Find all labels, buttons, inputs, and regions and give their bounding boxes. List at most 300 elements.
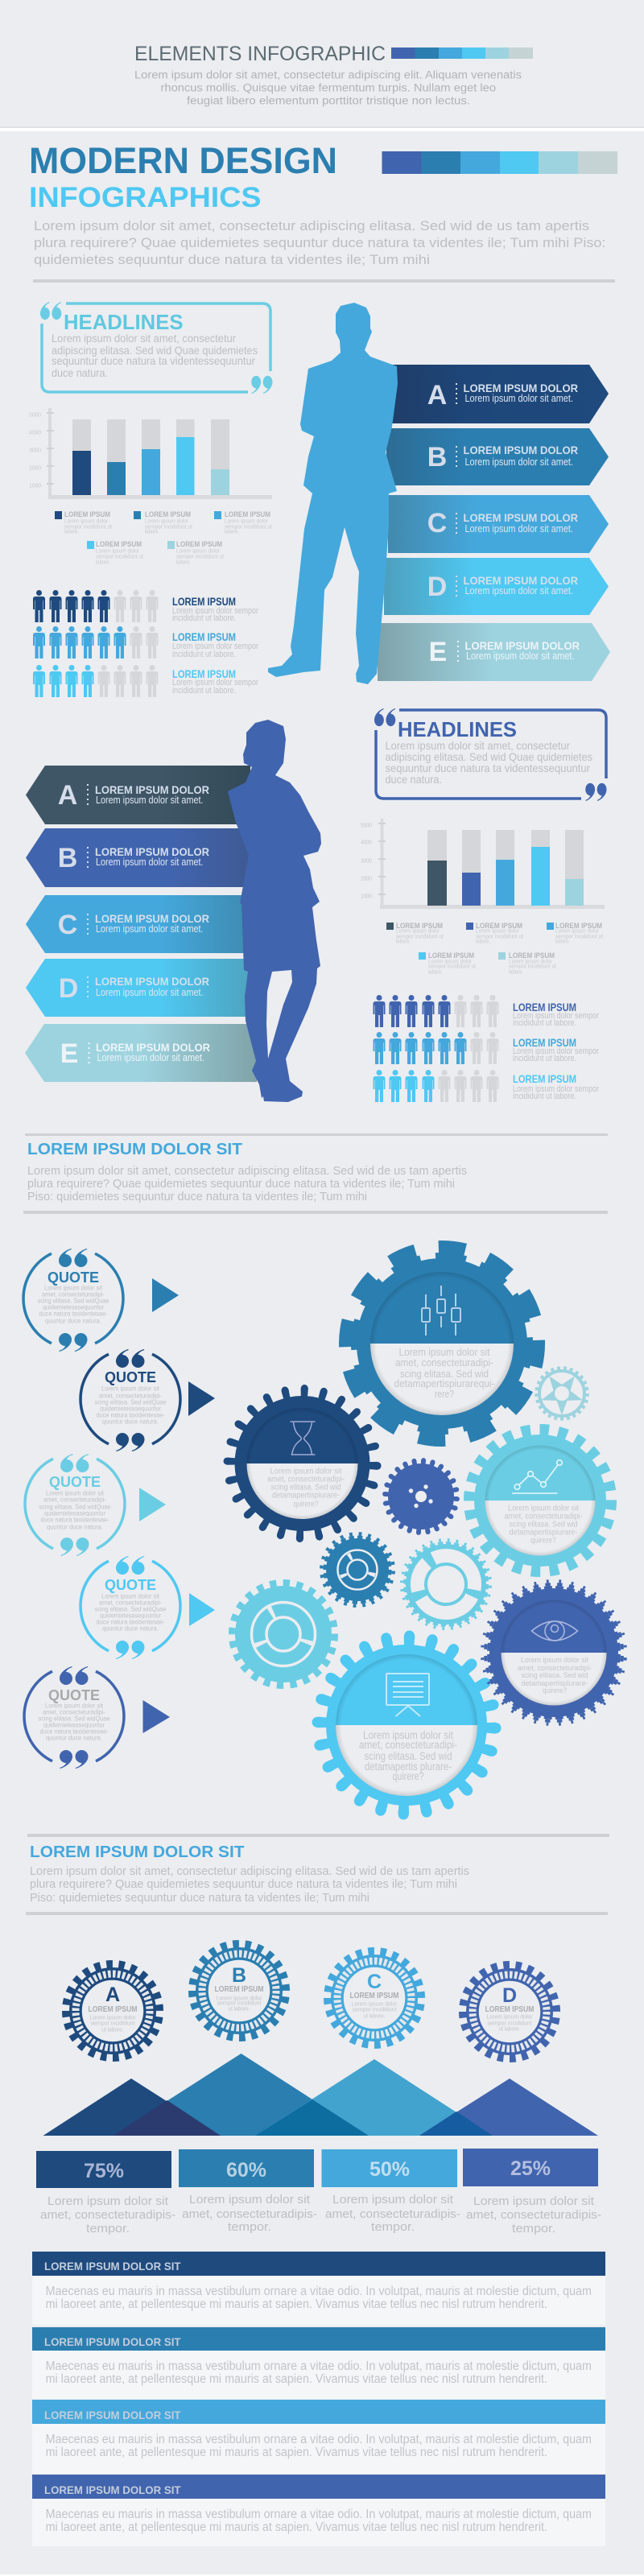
quote circle 3: Lorem ipsum dolor sit: [46, 1489, 105, 1497]
table row 2: Maecenas eu mauris in massa vestibulum ornare a vitae odio. In volutpat, mauris at molestie dictum, quam: [46, 2359, 592, 2373]
quote circle 4: scing elitasa. Sed widQuae: [95, 1605, 167, 1613]
arrow D: Lorem ipsum dolor sit amet.: [96, 987, 203, 998]
pictogram text: incididunt ut labore.: [172, 650, 236, 659]
bar chart 2: [361, 819, 605, 909]
arrow C: Lorem ipsum dolor sit amet.: [96, 923, 203, 935]
arrow A: Lorem ipsum dolor sit amet.: [465, 393, 573, 404]
badge gear D: D: [502, 1984, 517, 2007]
gear 5: line chart icon: [469, 1430, 611, 1571]
caption 3: Lorem ipsum dolor sit: [332, 2193, 454, 2207]
badge gear A: A: [105, 1984, 120, 2006]
chart legend 2: sempor incididunt ut: [509, 964, 556, 969]
quote text: adipiscing elitasa. Sed wid Quae quidemietes: [52, 344, 258, 357]
quote circle 3: quidemietesasequuntur: [44, 1510, 105, 1517]
pictogram text: LOREM IPSUM: [513, 1072, 576, 1085]
icon: closing quote mark: [585, 783, 607, 801]
quote circle 4: [80, 1556, 180, 1659]
badge gear C: C: [367, 1971, 382, 1993]
badge gear D: ut labore.: [499, 2027, 521, 2032]
quote circle 4: amet, consecteturadipi-: [99, 1599, 162, 1607]
caption 4: amet, consecteturadipis-: [466, 2208, 601, 2222]
chart legend 2: Lorem ipsum dolor: [509, 960, 553, 964]
chart legend 2: [386, 922, 603, 976]
section text: [27, 1164, 467, 1203]
axis labels: 1000: [29, 483, 41, 489]
icon: opening quote mark: [40, 302, 61, 320]
quote circle 1: duce natura taxidentesae-: [39, 1311, 108, 1317]
gear text: [394, 1346, 494, 1400]
intro paragraph: plura requirere? Quae quidemietes sequuntur duce natura ta videntes ile; Tum mihi Piso:: [34, 235, 605, 250]
quote circle 4: QUOTE: [105, 1577, 156, 1593]
quote circle 4: Lorem ipsum dolor sit: [101, 1592, 160, 1600]
quote circle 4: quuntur duce natura.: [102, 1624, 159, 1633]
badge gear A: [60, 1959, 165, 2063]
axis labels: 2000: [29, 465, 41, 472]
gear 4: small sprocket: [536, 1368, 588, 1418]
quote circle 2: quuntur duce natura.: [102, 1418, 159, 1425]
arrow C: C: [427, 508, 447, 539]
quote circle 1: QUOTE: [47, 1269, 99, 1286]
caption 4: Lorem ipsum dolor sit: [473, 2194, 595, 2208]
arrow C: [388, 495, 609, 553]
badge gear B: Lorem ipsum dolor: [216, 1996, 262, 2001]
gear text: amet, consecteturadipi-: [395, 1356, 493, 1368]
arrow list left A-E: [25, 766, 257, 1082]
arrow B: LOREM IPSUM DOLOR: [464, 444, 578, 456]
quote circle 2: quidemietesasequuntur: [100, 1406, 161, 1412]
panel: headlines quote box cyan: [40, 302, 272, 394]
caption 1: Lorem ipsum dolor sit: [47, 2194, 169, 2208]
chart legend 2: LOREM IPSUM: [555, 922, 602, 931]
pictogram text: Lorem ipsum dolor sempor: [172, 678, 258, 687]
intro text: [134, 69, 522, 106]
quote circle 1: amet, consecteturadipi-: [42, 1291, 105, 1298]
chart legend 1: labore.: [96, 560, 110, 565]
axis labels: 1000: [361, 894, 372, 900]
arrow 5: [143, 1700, 170, 1733]
gear text: scing elitasa. Sed wid: [509, 1520, 578, 1530]
chart legend 1: Lorem ipsum dolor: [64, 518, 109, 525]
bars: [427, 830, 584, 906]
table row 4: [32, 2475, 605, 2546]
gear text: detamapertisplurare-: [522, 1679, 588, 1688]
arrow C: C: [58, 910, 77, 940]
quote circle 1: scing elitasa. Sed widQuae: [37, 1298, 109, 1304]
icon: line chart: [512, 1460, 562, 1493]
pictogram text: LOREM IPSUM: [172, 667, 236, 680]
table row 2: [32, 2327, 605, 2399]
intro text: rhoncus mollis. Quisque vitae fermentum turpis. Nullam eget leo: [161, 82, 496, 93]
arrow B: LOREM IPSUM DOLOR: [95, 845, 209, 858]
people pictogram 2: [374, 995, 599, 1102]
colour swatch strip small: [391, 47, 533, 59]
chart legend 2: labore.: [555, 939, 570, 945]
chart legend 2: LOREM IPSUM: [428, 952, 474, 960]
percent box 75: [36, 2151, 171, 2188]
arrow E: [25, 1024, 257, 1082]
quote text: [52, 332, 258, 379]
arrow 3: [139, 1488, 166, 1521]
gear 2: hourglass icon: [225, 1385, 380, 1542]
chart legend 2: sempor incididunt ut: [396, 934, 444, 940]
gear text: scing elitasa. Sed wid: [400, 1368, 489, 1380]
badge gear B: sempor incididunt: [217, 2001, 262, 2006]
quote circle 5: quidemietesasequuntur: [43, 1721, 105, 1729]
gear text: amet, consecteturadipi-: [518, 1664, 592, 1673]
heading: headlines: HEADLINES: [64, 310, 184, 334]
chart legend 2: labore.: [396, 939, 411, 945]
section text: Piso: quidemietes sequuntur duce natura ta videntes ile; Tum mihi: [27, 1190, 367, 1203]
arrow D: D: [427, 572, 447, 602]
intro text: feugiat libero elementum porttitor tristique non lectus.: [187, 95, 470, 106]
arrow D: LOREM IPSUM DOLOR: [95, 975, 209, 988]
pictogram text: incididunt ut labore.: [513, 1018, 576, 1028]
arrow E: [378, 623, 610, 681]
chart legend 1: [55, 510, 272, 565]
pictogram text: Lorem ipsum dolor sempor: [513, 1011, 599, 1021]
chart legend 2: LOREM IPSUM: [396, 922, 443, 931]
gear text: Lorem ipsum dolor sit: [363, 1729, 453, 1741]
badge gear A: sempor incididunt: [91, 2021, 135, 2027]
quote circle 2: QUOTE: [105, 1369, 156, 1385]
axis labels: 2000: [361, 876, 372, 882]
quote circle 4: quidemietesasequuntur: [100, 1612, 161, 1620]
chart legend 1: sempor incididunt ut: [64, 525, 112, 530]
table row 3: mi laoreet ante, at pellentesque mi mauris at sapien. Vivamus vitae tellus nec nisl rutrum hendrerit.: [46, 2446, 547, 2459]
arrow D: D: [59, 973, 78, 1004]
pictogram text: incididunt ut labore.: [172, 613, 236, 623]
gear 9: presentation board icon: [314, 1633, 499, 1818]
pictogram text: Lorem ipsum dolor sempor: [513, 1046, 599, 1056]
badge gear D: sempor incididunt: [488, 2021, 532, 2027]
section text: [30, 1864, 469, 1905]
arrow D: Lorem ipsum dolor sit amet.: [465, 585, 573, 597]
section heading: gears: LOREM IPSUM DOLOR SIT: [27, 1141, 242, 1158]
quote circle 2: scing elitasa. Sed widQuae: [95, 1399, 167, 1406]
icon: candlesticks: [422, 1286, 460, 1335]
arrow C: [26, 895, 250, 953]
quote circle 2: Lorem ipsum dolor sit: [101, 1385, 160, 1393]
table row 4: mi laoreet ante, at pellentesque mi mauris at sapien. Vivamus vitae tellus nec nisl rutrum hendrerit.: [46, 2520, 547, 2534]
gear text: [518, 1656, 592, 1695]
caption 2: [182, 2193, 317, 2234]
caption 3: tempor.: [371, 2220, 415, 2234]
quote text: sequuntur duce natura ta videntessequuntur: [52, 354, 255, 367]
axis labels: [361, 823, 372, 900]
table row 4: LOREM IPSUM DOLOR SIT: [44, 2483, 181, 2496]
chart legend 2: labore.: [509, 969, 523, 976]
gear text: rere?: [435, 1388, 454, 1400]
gear text: quirere?: [543, 1686, 567, 1695]
icon: hourglass: [290, 1422, 316, 1455]
quote circle 5: scing elitasa. Sed widQuae: [39, 1715, 110, 1723]
badge gear D: [457, 1959, 562, 2064]
arrow B: B: [427, 442, 447, 473]
gear text: scing elitasa. Sed wid: [522, 1671, 588, 1680]
gear 8: cyan ring: [233, 1583, 334, 1685]
table row 1: LOREM IPSUM DOLOR SIT: [44, 2260, 181, 2273]
chart legend 1: Lorem ipsum dolor: [176, 549, 221, 554]
caption 2: Lorem ipsum dolor sit: [189, 2193, 311, 2207]
pictogram text: Lorem ipsum dolor sempor: [513, 1084, 599, 1094]
arrow C: LOREM IPSUM DOLOR: [95, 912, 209, 925]
chart legend 1: LOREM IPSUM: [145, 510, 191, 519]
table row 1: Maecenas eu mauris in massa vestibulum ornare a vitae odio. In volutpat, mauris at molestie dictum, quam: [46, 2285, 592, 2298]
pictogram text: Lorem ipsum dolor sempor: [172, 606, 258, 616]
chart legend 2: labore.: [476, 939, 490, 945]
gear text: detamapertispiurare-: [509, 1528, 578, 1538]
heading: elements infographic: ELEMENTS INFOGRAPHIC: [134, 43, 386, 65]
badge gear D: Lorem ipsum dolor: [486, 2014, 533, 2021]
arrow A: [392, 365, 609, 423]
heading: headlines: HEADLINES: [398, 717, 517, 741]
pictogram text: LOREM IPSUM: [172, 595, 236, 608]
gear text: amet, consecteturadipi-: [504, 1512, 583, 1521]
quote circle 3: QUOTE: [49, 1474, 101, 1490]
gear text: Lorem ipsum dolor sit: [508, 1504, 579, 1513]
percent box 60: [179, 2149, 314, 2187]
quote circle 5: Lorem ipsum dolor sit: [45, 1702, 104, 1710]
people pictogram 1: [33, 590, 258, 697]
caption 2: amet, consecteturadipis-: [182, 2207, 317, 2221]
colour swatch strip large: [382, 151, 617, 174]
badge gear A: LOREM IPSUM: [89, 2005, 137, 2014]
gear text: Lorem ipsum dolor sit: [270, 1467, 342, 1476]
quote circle 2: amet, consecteturadipi-: [99, 1393, 162, 1399]
gear 7: hollow cyan sprocket: [400, 1538, 492, 1630]
caption 1: amet, consecteturadipis-: [40, 2208, 175, 2222]
intro text: Lorem ipsum dolor sit amet, consectetur adipiscing elit. Aliquam venenatis: [134, 69, 522, 80]
gear text: amet, consecteturadipi-: [359, 1739, 457, 1751]
chart legend 1: Lorem ipsum dolor: [145, 518, 189, 525]
arrow D: [26, 959, 250, 1017]
quote circle 1: quuntur duce natura.: [45, 1317, 101, 1325]
percent box 50: [322, 2149, 457, 2187]
gear text: amet, consecteturadipi-: [267, 1475, 345, 1484]
title: modern design: MODERN DESIGN: [29, 140, 337, 181]
axis labels: 5000: [361, 823, 372, 829]
percent box 75: 75%: [84, 2160, 124, 2182]
arrow E: E: [60, 1038, 78, 1069]
chart legend 2: LOREM IPSUM: [476, 922, 522, 931]
chart legend 1: labore.: [64, 530, 79, 535]
gear text: quirere?: [393, 1770, 423, 1782]
chart legend 2: Lorem ipsum dolor: [555, 929, 600, 934]
arrow 2: [188, 1381, 215, 1416]
badge gear C: ut labore.: [364, 2014, 386, 2019]
quote circle 3: scing elitasa. Sed widQuae: [39, 1504, 111, 1510]
chart legend 2: Lorem ipsum dolor: [428, 960, 473, 964]
arrow A: A: [427, 380, 447, 411]
badge gear B: ut labore.: [229, 2006, 250, 2013]
pictogram text: [513, 1001, 599, 1101]
quote text: duce natura.: [52, 366, 108, 379]
arrow A: Lorem ipsum dolor sit amet.: [96, 795, 203, 806]
icon: presentation board: [386, 1674, 429, 1716]
chart legend 1: labore.: [176, 560, 191, 565]
chart legend 1: Lorem ipsum dolor: [225, 518, 269, 525]
axis labels: 5000: [29, 412, 41, 419]
caption 4: [466, 2194, 601, 2235]
table row 2: mi laoreet ante, at pellentesque mi mauris at sapien. Vivamus vitae tellus nec nisl rutrum hendrerit.: [46, 2372, 547, 2386]
chart legend 2: LOREM IPSUM: [509, 952, 555, 960]
chart legend 1: LOREM IPSUM: [225, 510, 270, 519]
bar chart 1: [29, 408, 272, 499]
quote circle 1: Lorem ipsum dolor sit: [44, 1285, 103, 1291]
gear 3: small indigo: [382, 1458, 460, 1535]
chart legend 2: Lorem ipsum dolor: [396, 929, 440, 934]
arrow C: Lorem ipsum dolor sit amet.: [465, 523, 573, 535]
table row 1: mi laoreet ante, at pellentesque mi mauris at sapien. Vivamus vitae tellus nec nisl rutrum hendrerit.: [46, 2297, 547, 2311]
arrow 1: [152, 1278, 179, 1312]
chart legend 1: Lorem ipsum dolor: [96, 549, 140, 554]
main title block: [29, 140, 617, 267]
quote circle 5: QUOTE: [48, 1687, 100, 1703]
axis labels: 3000: [361, 858, 372, 865]
icon: closing quote mark: [251, 376, 272, 394]
pictogram text: [172, 595, 258, 696]
caption 4: tempor.: [512, 2222, 555, 2235]
intro paragraph: Lorem ipsum dolor sit amet, consectetur adipiscing elitasa. Sed wid de us tam apertis: [34, 218, 589, 233]
arrow E: E: [429, 637, 447, 667]
badge gear C: [322, 1946, 427, 2050]
arrow E: Lorem ipsum dolor sit amet.: [466, 650, 575, 662]
section heading: gears: [27, 1141, 467, 1203]
quote circle 5: quuntur duce natura.: [46, 1734, 102, 1742]
overlapping mountains: [43, 2054, 598, 2136]
arrow 4: [189, 1593, 215, 1626]
silhouette: woman: [228, 720, 321, 1102]
table row 3: [32, 2400, 605, 2474]
pictogram text: LOREM IPSUM: [513, 1001, 576, 1013]
gear text: quirere?: [530, 1536, 556, 1546]
quote circle 5: [24, 1666, 124, 1769]
arrow B: Lorem ipsum dolor sit amet.: [465, 456, 573, 468]
quote circle 1: [23, 1249, 123, 1352]
arrow E: LOREM IPSUM DOLOR: [96, 1041, 210, 1054]
quote circle 5: amet, consecteturadipi-: [43, 1708, 105, 1716]
chart legend 1: LOREM IPSUM: [96, 540, 142, 549]
chart legend 1: LOREM IPSUM: [176, 540, 222, 549]
arrow B: [26, 828, 250, 887]
table row 2: LOREM IPSUM DOLOR SIT: [44, 2335, 181, 2348]
caption 1: tempor.: [86, 2222, 130, 2235]
arrow D: [384, 558, 609, 615]
arrow list right A-E: [378, 365, 610, 681]
chart legend 1: labore.: [145, 530, 159, 535]
gear text: Lorem ipsum dolor sit: [399, 1346, 490, 1358]
gear text: scing elitasa. Sed wid: [364, 1750, 452, 1762]
table row 4: Maecenas eu mauris in massa vestibulum ornare a vitae odio. In volutpat, mauris at molestie dictum, quam: [46, 2508, 592, 2521]
quote circle 2: duce natura taxidentesae-: [97, 1412, 165, 1418]
top header: elements infographic: [134, 43, 533, 106]
quote text: sequuntur duce natura ta videntessequuntur: [385, 762, 590, 774]
section heading: percentages: LOREM IPSUM DOLOR SIT: [30, 1843, 245, 1861]
pictogram text: Lorem ipsum dolor sempor: [172, 642, 258, 651]
icon: opening quote mark: [374, 708, 395, 726]
chart legend 2: sempor incididunt ut: [476, 934, 523, 940]
quote text: duce natura.: [385, 773, 442, 786]
quote text: Lorem ipsum dolor sit amet, consectetur: [52, 332, 236, 345]
silhouette: man: [268, 303, 398, 684]
intro paragraph: [34, 218, 605, 267]
quote circle 3: quuntur duce natura.: [47, 1523, 103, 1531]
chart legend 1: LOREM IPSUM: [64, 510, 110, 519]
chart legend 2: labore.: [428, 969, 443, 976]
caption 2: tempor.: [228, 2220, 271, 2234]
chart legend 1: sempor incididunt ut: [225, 525, 272, 530]
subtitle: infographics: INFOGRAPHICS: [29, 182, 261, 213]
gear 10: eye icon: [477, 1575, 631, 1730]
gear 1: candlestick icon: [345, 1247, 539, 1440]
axis labels: 4000: [29, 430, 41, 436]
icon: eye: [531, 1621, 578, 1641]
chart legend 2: Lorem ipsum dolor: [476, 929, 520, 934]
badge gear B: B: [232, 1964, 246, 1987]
table row 1: [32, 2252, 605, 2325]
quote circle 3: amet, consecteturadipi-: [43, 1496, 106, 1504]
axis labels: [29, 412, 41, 489]
percent box 25: [463, 2149, 598, 2186]
quote text: adipiscing elitasa. Sed wid Quae quidemietes: [385, 750, 592, 763]
percent box 60: 60%: [226, 2159, 266, 2182]
gear 6: small teal ring: [320, 1533, 394, 1607]
caption 3: [325, 2193, 460, 2234]
arrow B: Lorem ipsum dolor sit amet.: [96, 857, 203, 868]
gear text: detamapertispiurare-: [272, 1491, 340, 1501]
quote circle 5: duce natura taxidentesae-: [40, 1728, 109, 1736]
gear text: [504, 1504, 583, 1546]
pictogram text: incididunt ut labore.: [513, 1054, 576, 1063]
quote text: Lorem ipsum dolor sit amet, consectetur: [385, 739, 570, 752]
quote circle 2: [80, 1349, 180, 1451]
arrow A: [26, 766, 250, 824]
arrow A: LOREM IPSUM DOLOR: [464, 382, 578, 394]
arrow E: Lorem ipsum dolor sit amet.: [97, 1052, 204, 1063]
arrow E: LOREM IPSUM DOLOR: [465, 639, 580, 652]
chart legend 1: sempor incididunt ut: [145, 525, 192, 530]
chart legend 1: sempor incididunt ut: [96, 554, 143, 560]
caption 1: [40, 2194, 175, 2235]
gear text: Lorem ipsum dolor sit: [521, 1656, 588, 1665]
pictogram text: LOREM IPSUM: [172, 630, 236, 643]
arrow A: LOREM IPSUM DOLOR: [95, 783, 209, 796]
gear text: quirere?: [293, 1501, 319, 1509]
caption 3: amet, consecteturadipis-: [325, 2207, 460, 2221]
quote circle 1: quidemietesasequuntur: [43, 1304, 104, 1311]
pictogram text: LOREM IPSUM: [513, 1036, 576, 1049]
badge gear C: Lorem ipsum dolor: [351, 2001, 398, 2008]
percent box 25: 25%: [510, 2157, 551, 2180]
gear text: detamapertis plurare-: [365, 1761, 452, 1773]
section text: plura requirere? Quae quidemietes sequuntur duce natura ta videntes ile; Tum mihi: [30, 1877, 457, 1891]
badge gear A: Lorem ipsum dolor: [90, 2016, 136, 2021]
section text: Lorem ipsum dolor sit amet, consectetur adipiscing elitasa. Sed wid de us tam apertis: [27, 1164, 467, 1178]
chart legend 1: sempor incididunt ut: [176, 554, 224, 560]
badge gear B: LOREM IPSUM: [214, 1985, 264, 1994]
arrow D: LOREM IPSUM DOLOR: [464, 574, 578, 587]
arrow B: B: [58, 843, 77, 873]
badge gear A: ut labore.: [101, 2027, 124, 2033]
section text: Piso: quidemietes sequuntur duce natura ta videntes ile; Tum mihi: [30, 1891, 369, 1905]
table row 3: Maecenas eu mauris in massa vestibulum ornare a vitae odio. In volutpat, mauris at molestie dictum, quam: [46, 2433, 592, 2446]
arrow B: [386, 428, 609, 485]
arrow C: LOREM IPSUM DOLOR: [464, 511, 578, 524]
axis labels: 4000: [361, 840, 372, 845]
axis labels: 3000: [29, 448, 41, 454]
badge gear C: LOREM IPSUM: [349, 1992, 399, 2000]
chart legend 2: sempor incididunt ut: [428, 964, 476, 969]
